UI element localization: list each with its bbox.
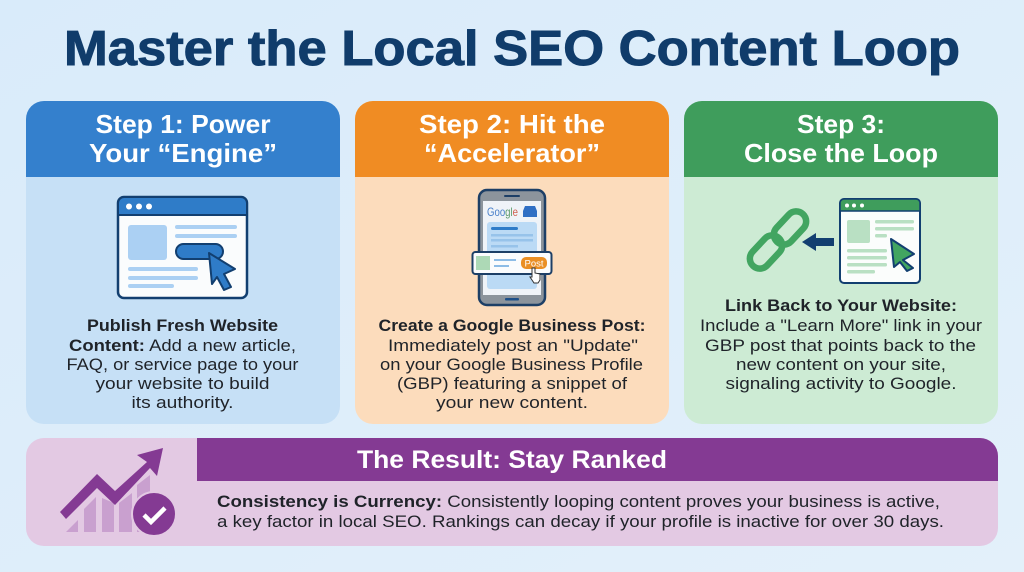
panel: step 2: [355, 101, 669, 424]
result text: a key factor in local SEO. Rankings can decay if your profile is inactive for over 30 days.: [217, 512, 944, 531]
step 1 text: [66, 316, 299, 412]
step 2 header: “Accelerator”: [424, 138, 600, 168]
step 1 text: Publish Fresh Website: [87, 316, 278, 335]
step 1 text: Content: Add a new article,: [69, 336, 296, 355]
result text: [217, 492, 944, 531]
result header: [197, 438, 998, 481]
step 3 text: GBP post that points back to the: [705, 336, 976, 355]
icon: phone with Google post: Google: [487, 205, 518, 219]
step 1 text: its authority.: [132, 393, 234, 412]
icon: browser with green cursor: [840, 199, 920, 283]
step 3 text: Include a "Learn More" link in your: [700, 316, 982, 335]
step 3 text: Link Back to Your Website:: [725, 296, 957, 315]
step 3 text: [700, 296, 982, 393]
panel: result: [26, 438, 998, 546]
result header: The Result: Stay Ranked: [357, 446, 667, 474]
result text: Consistency is Currency: Consistently looping content proves your business is active,: [217, 492, 940, 511]
step 2 text: [378, 316, 646, 412]
step 2 text: Immediately post an "Update": [388, 336, 638, 355]
step 3 header: [684, 101, 998, 177]
step 3 header: Step 3:: [797, 109, 885, 139]
step 1 header: [26, 101, 340, 177]
panel: step 1: [26, 101, 340, 424]
icon: browser with cursor: [118, 197, 247, 298]
step 1 header: Step 1: Power: [96, 109, 270, 139]
step 1 text: your website to build: [96, 374, 270, 393]
step 1 header: Your “Engine”: [89, 138, 277, 168]
icon: growth chart with check: [60, 448, 176, 536]
icon: chain link: [746, 207, 810, 273]
icon: phone with Google post: Post: [524, 258, 544, 270]
step 2 text: Create a Google Business Post:: [378, 316, 646, 335]
icon: arrow: [802, 233, 834, 251]
title: Master the Local SEO Content Loop: [64, 22, 960, 76]
step 2 text: on your Google Business Profile: [380, 355, 643, 374]
step 3 text: new content on your site,: [736, 355, 946, 374]
step 3 text: signaling activity to Google.: [726, 374, 956, 393]
step 2 header: [355, 101, 669, 177]
step 1 text: FAQ, or service page to your: [66, 355, 299, 374]
step 3 header: Close the Loop: [744, 138, 938, 168]
panel: step 3: [684, 101, 998, 424]
step 2 header: Step 2: Hit the: [419, 109, 605, 139]
icon: phone with Google post: [472, 190, 552, 305]
step 2 text: your new content.: [436, 393, 588, 412]
step 2 text: (GBP) featuring a snippet of: [397, 374, 627, 393]
